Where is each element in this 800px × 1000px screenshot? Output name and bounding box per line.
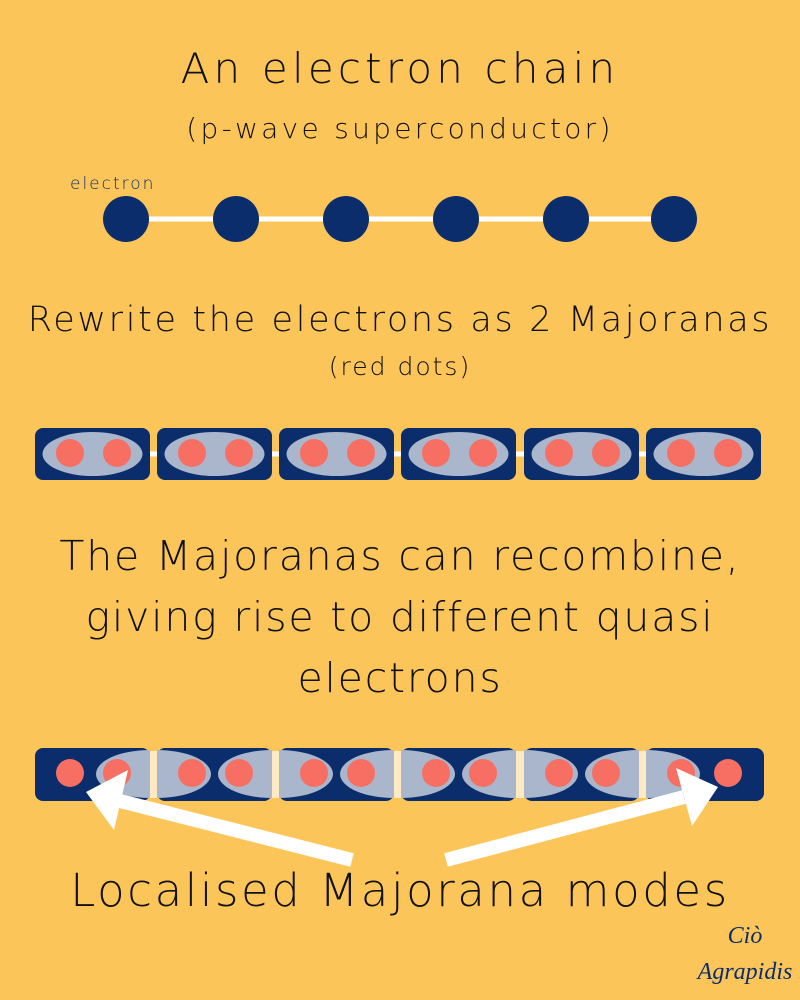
text block: recombine: electrons	[297, 654, 503, 702]
electron chain	[103, 196, 697, 242]
text block: recombine	[59, 532, 741, 702]
heading: rewrite: Rewrite the electrons as 2 Majoranas	[28, 300, 772, 340]
subheading: red dots: (red dots)	[329, 352, 471, 381]
text block: recombine: The Majoranas can recombine,	[59, 532, 741, 580]
signature: Ciò	[728, 923, 762, 949]
text block: recombine: giving rise to different quasi	[85, 593, 714, 641]
title: An electron chain	[181, 44, 619, 93]
signature	[696, 923, 792, 985]
heading: localised modes: Localised Majorana modes	[70, 864, 730, 917]
label: electron: electron	[70, 174, 155, 194]
signature: Agrapidis	[698, 959, 792, 985]
majorana pairs chain	[35, 428, 761, 480]
subtitle: (p-wave superconductor)	[186, 112, 614, 145]
recombined majorana chain	[35, 748, 764, 801]
arrow: left	[86, 770, 352, 860]
arrow: right	[446, 768, 718, 860]
